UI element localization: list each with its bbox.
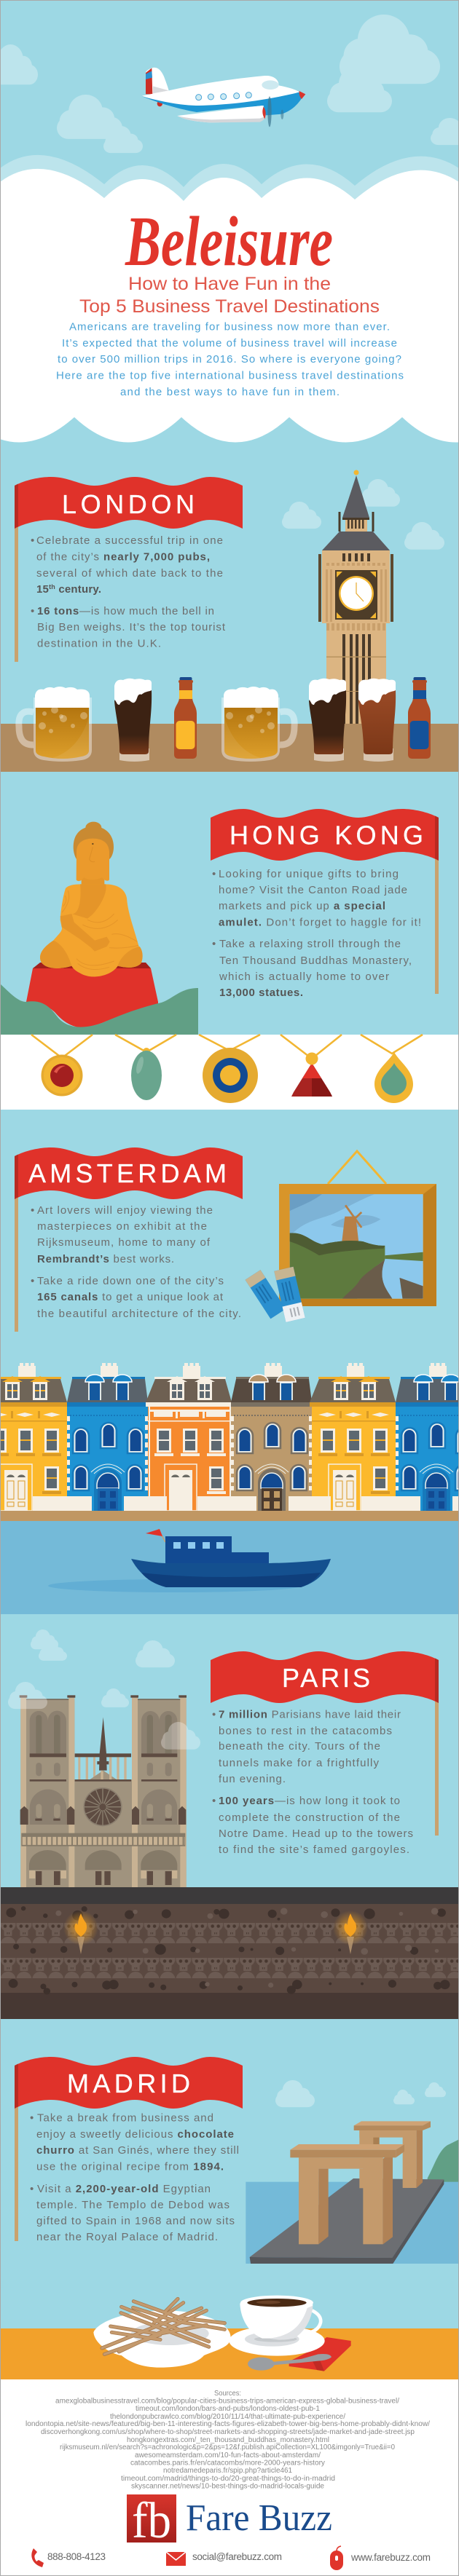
Hong Kong facts: which is actually home to over (219, 971, 389, 983)
Madrid facts: • (30, 2112, 34, 2125)
flag: London: LONDON (62, 489, 195, 519)
panel: header sky and intro (0, 15, 459, 443)
brown pint (358, 679, 396, 762)
panel: footer (0, 2379, 459, 2576)
torch right (333, 1911, 368, 1954)
Paris facts: to find the site’s famed gargoyles. (219, 1844, 409, 1856)
title: Top 5 Business Travel Destinations (79, 296, 380, 317)
contact: website (330, 2546, 431, 2570)
intro text: to over 500 million trips in 2016. So where is everyone going? (58, 353, 401, 366)
Hong Kong facts: 13,000 statues. (219, 987, 303, 999)
sources list: notredamedeparis.fr/spip.php?article461 (163, 2467, 292, 2475)
flag: Hong Kong (211, 809, 439, 994)
Hong Kong facts: Take a relaxing stroll through the (219, 938, 401, 950)
panel: Hong Kong (0, 809, 459, 1110)
Hong Kong facts: home? Visit the Canton Road jade (219, 884, 407, 896)
table (0, 2328, 459, 2379)
Hong Kong facts: markets and pick up a special (219, 900, 385, 912)
Hong Kong facts: Ten Thousand Buddhas Monastery, (219, 955, 412, 967)
contact: email (166, 2551, 282, 2566)
illustration: framed painting (279, 1151, 436, 1306)
sources list: hongkongextras.com/_ten_thousand_buddhas_monastery.html (127, 2436, 329, 2444)
Madrid facts: churro at San Ginés, where they still (36, 2144, 239, 2157)
beer mug left (19, 687, 92, 762)
blue label bottle (408, 677, 431, 759)
Hong Kong facts: • (212, 868, 216, 880)
Madrid facts: temple. The Templo de Debod was (36, 2199, 230, 2211)
illustration: airplane (142, 68, 305, 127)
intro text: Here are the top five international business travel destinations (56, 370, 404, 382)
illustration: canal houses (0, 1363, 459, 1521)
illustration: Big Ben (318, 470, 393, 724)
Madrid facts: gifted to Spain in 1968 and now sits (36, 2215, 235, 2227)
Paris facts: Notre Dame. Head up to the towers (219, 1828, 413, 1840)
Paris facts: 100 years—is how long it took to (219, 1795, 400, 1807)
Madrid facts (30, 2112, 239, 2243)
title (79, 202, 380, 317)
London facts: • (31, 534, 34, 547)
Paris facts: fun evening. (219, 1773, 286, 1785)
Amsterdam facts: Rembrandt’s best works. (37, 1253, 174, 1265)
flag: Madrid (15, 2057, 243, 2241)
bar counter (0, 724, 459, 772)
illustration: spoon (248, 2354, 332, 2371)
contact: phone: 888-808-4123 (47, 2551, 106, 2562)
Amsterdam facts: • (31, 1275, 34, 1287)
dark pint (114, 679, 152, 762)
sources list: amexglobalbusinesstravel.com/blog/popular-cities-business-trips-american-express-global-business-travel/ (55, 2397, 399, 2406)
illustration: boat (48, 1529, 331, 1592)
sources list: skyscanner.net/news/10-best-things-do-madrid-locals-guide (131, 2483, 324, 2490)
amulet: jade oval (131, 1048, 162, 1100)
Hong Kong facts (212, 868, 421, 999)
London facts: 16 tons—is how much the bell in (37, 605, 214, 617)
amulet: blue ring (203, 1048, 258, 1103)
sources list: catacombes.paris.fr/en/catacombs/more-2000-years-history (130, 2460, 325, 2467)
flag: Madrid: MADRID (67, 2069, 190, 2098)
sources list: londontopia.net/site-news/featured/big-ben-11-interesting-facts-figures-elizabeth-tower-big-bens-home-probably-didnt-know/ (26, 2420, 430, 2428)
cloud band: white scallops (0, 155, 459, 443)
Paris facts: complete the construction of the (219, 1812, 400, 1824)
Madrid facts: Visit a 2,200-year-old Egyptian (37, 2183, 211, 2195)
London facts: Celebrate a successful trip in one (36, 534, 223, 547)
intro text: Americans are traveling for business now more than ever. (69, 320, 390, 333)
sources list: timeout.com/madrid/things-to-do/20-great-things-to-do-in-madrid (121, 2475, 335, 2483)
logo: Fare Buzz: Fare Buzz (186, 2497, 332, 2539)
clouds over cathedral (8, 1682, 200, 1750)
Paris facts: beneath the city. Tours of the (219, 1740, 380, 1753)
illustration: catacombs (0, 1887, 459, 2019)
contact: website: www.farebuzz.com (350, 2552, 431, 2563)
sources list (26, 2390, 430, 2490)
panel: Amsterdam (0, 1147, 459, 1614)
illustration: Buddha on pedestal (0, 822, 198, 1035)
contact: email: social@farebuzz.com (192, 2551, 282, 2562)
sources list: discoverhongkong.com/us/shop/where-to-shop/street-markets-and-shopping-streets/jade-market-and-jade-street.jsp (41, 2428, 415, 2436)
London facts: • (31, 605, 34, 617)
illustration: Temple of Debod (246, 2121, 459, 2264)
beer mug right (221, 687, 294, 762)
logo: Fare Buzz: fb (132, 2493, 171, 2549)
Amsterdam facts: Rijksmuseum, home to many of (37, 1236, 211, 1249)
flag: Amsterdam: AMSTERDAM (28, 1158, 227, 1188)
intro text (56, 320, 404, 398)
Amsterdam facts: Art lovers will enjoy viewing the (37, 1204, 213, 1217)
sources list: Sources: (214, 2390, 241, 2398)
Amsterdam facts: the beautiful architecture of the city. (37, 1308, 241, 1320)
flag: London (15, 477, 243, 662)
flag: Paris (211, 1651, 439, 1836)
clouds over Paris (31, 1629, 175, 1707)
London facts: several of which date back to the (36, 567, 223, 580)
illustration: Notre Dame (20, 1695, 187, 1888)
sources list: thelondonpubcrawlco.com/blog/2010/11/14/that-ultimate-pub-experience/ (110, 2413, 345, 2421)
Madrid facts: near the Royal Palace of Madrid. (36, 2231, 218, 2243)
Paris facts: 7 million Parisians have laid their (219, 1708, 401, 1721)
clouds over Madrid (275, 2080, 446, 2107)
Paris facts: • (212, 1795, 216, 1807)
torch left (63, 1911, 98, 1954)
illustration: napkin (289, 2337, 351, 2371)
title: Beleisure (125, 202, 333, 281)
flag: Amsterdam (15, 1147, 243, 1332)
London facts (31, 534, 226, 649)
Madrid facts: enjoy a sweetly delicious chocolate (36, 2128, 234, 2141)
clouds in sky (0, 15, 459, 153)
logo: Fare Buzz (127, 2493, 332, 2549)
Madrid facts: use the original recipe from 1894. (36, 2161, 224, 2173)
canal water (0, 1521, 459, 1614)
illustration: churros on plate (93, 2299, 231, 2368)
Hong Kong facts: Looking for unique gifts to bring (219, 868, 399, 880)
icon: tickets (246, 1267, 305, 1322)
dark pint second (309, 679, 346, 762)
amulets (31, 1035, 423, 1103)
London facts: of the city’s nearly 7,000 pubs, (36, 550, 210, 564)
Paris facts: • (212, 1708, 216, 1721)
yellow label bottle (174, 677, 197, 759)
sources list: rijksmuseum.nl/en/search?s=achronologic&p=2&ps=12&f.publish.apiCollection=XL100&imgonly=True&ii=0 (60, 2443, 395, 2451)
London facts: th (49, 583, 55, 590)
illustration: coffee cup and saucer (229, 2296, 325, 2356)
panel: Madrid (0, 2057, 459, 2379)
intro text: and the best ways to have fun in them. (120, 386, 340, 398)
footer background (0, 2379, 459, 2576)
amulet strip background (0, 1035, 459, 1110)
Hong Kong facts: amulet. Don’t forget to haggle for it! (219, 916, 421, 929)
Amsterdam facts: 165 canals to get a unique look at (37, 1291, 224, 1303)
flag: Hong Kong: HONG KONG (230, 820, 423, 850)
Amsterdam facts (31, 1204, 241, 1320)
sources list: awesomeamsterdam.com/10-fun-facts-about-amsterdam/ (135, 2451, 321, 2460)
London facts: century. (55, 583, 101, 596)
clouds around Big Ben (282, 479, 444, 550)
London facts: Big Ben weighs. It’s the top tourist (37, 621, 226, 633)
title: How to Have Fun in the (128, 274, 331, 294)
panel: Paris (0, 1629, 459, 2019)
amulet: teardrop (374, 1052, 413, 1103)
Paris facts: tunnels make for a frightfully (219, 1757, 379, 1769)
London facts: 15 (36, 583, 49, 596)
Amsterdam facts: masterpieces on exhibit at the (37, 1220, 207, 1233)
amulet: red triangle (291, 1053, 332, 1097)
contact: phone (31, 2548, 106, 2567)
Paris facts: bones to rest in the catacombs (219, 1725, 392, 1737)
panel: London (0, 470, 459, 772)
Madrid facts: Take a break from business and (37, 2112, 213, 2125)
Hong Kong facts: • (212, 938, 216, 950)
flag: Paris: PARIS (282, 1663, 370, 1693)
intro text: It’s expected that the volume of business travel will increase (62, 337, 397, 349)
Amsterdam facts: • (31, 1204, 34, 1217)
Amsterdam facts: Take a ride down one of the city’s (37, 1275, 224, 1287)
Madrid facts: • (30, 2183, 34, 2195)
amulet: ruby (41, 1054, 83, 1097)
London facts: destination in the U.K. (37, 638, 161, 649)
Paris facts (212, 1708, 413, 1856)
sources list: timeout.com/london/bars-and-pubs/londons-oldest-pub-1 (136, 2405, 320, 2413)
